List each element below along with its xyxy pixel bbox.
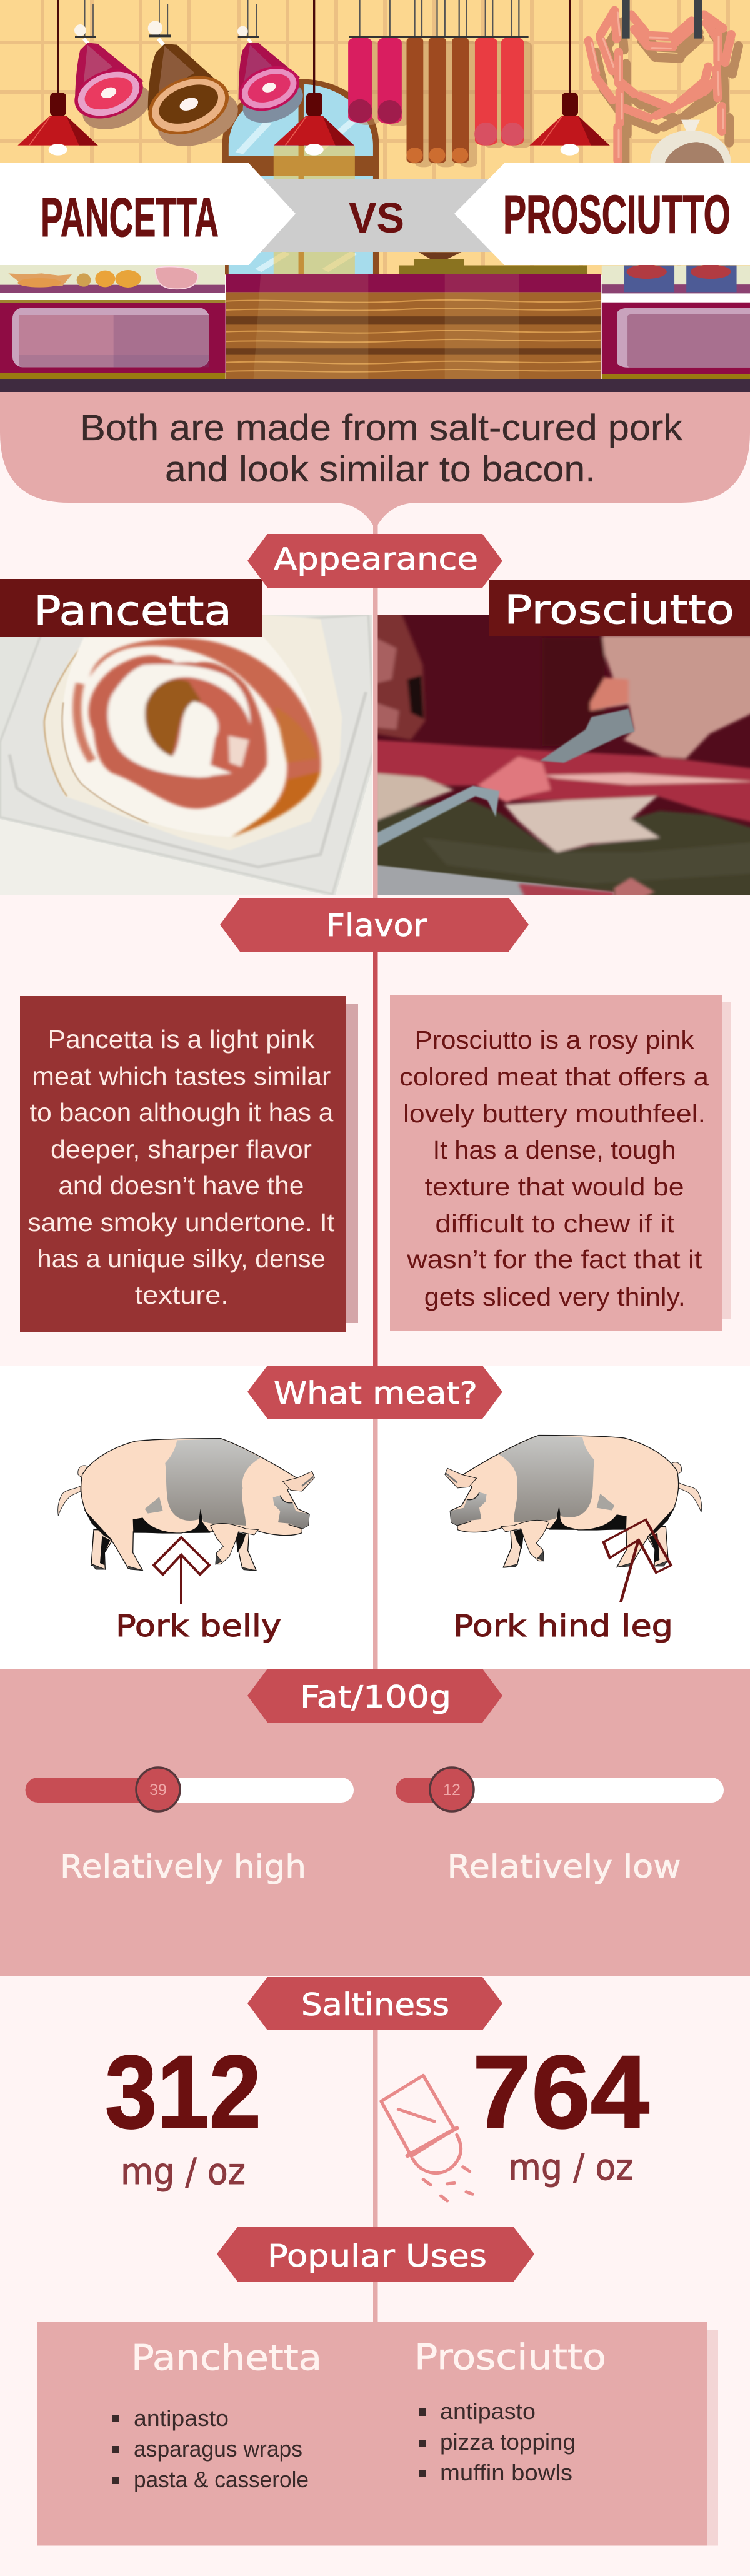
left title banner <box>0 163 296 265</box>
arrow: pork belly <box>154 1537 209 1604</box>
pendant lamps <box>18 0 610 156</box>
label: pancetta: Pancetta <box>34 588 232 635</box>
prosciutto flavor text: It has a dense, tough <box>433 1135 676 1164</box>
callout: intro statement <box>0 392 750 525</box>
central divider: appearance <box>373 519 378 900</box>
slider: pancetta fat <box>25 1768 354 1811</box>
intro text: Both are made from salt-cured pork <box>80 408 683 448</box>
arrow: pork hind leg <box>604 1520 671 1602</box>
label: prosciutto <box>489 580 750 636</box>
central divider: flavor <box>373 950 378 1369</box>
list: prosciutto uses <box>419 2398 582 2485</box>
header illustration: butcher shop <box>0 0 750 392</box>
prosciutto flavor text: texture that would be <box>425 1172 684 1201</box>
label: relatively high: Relatively high <box>60 1849 306 1886</box>
heading: what meat <box>248 1366 502 1419</box>
right display counter <box>602 264 750 379</box>
list: panchetta uses: asparagus wraps <box>134 2436 302 2462</box>
section: what meat background <box>0 1366 750 1669</box>
label: pork belly: Pork belly <box>116 1609 281 1644</box>
prosciutto flavor text: gets sliced very thinly. <box>424 1282 686 1311</box>
icon: pig with belly marker <box>58 1439 314 1604</box>
heading: panchetta uses: Panchetta <box>131 2338 322 2378</box>
label: pork hind leg: Pork hind leg <box>453 1609 673 1644</box>
heading: appearance: Appearance <box>274 541 478 577</box>
list: prosciutto uses: muffin bowls <box>440 2460 572 2485</box>
hanging hams <box>68 0 309 156</box>
photo: prosciutto being sliced <box>375 613 750 905</box>
stat: pancetta saltiness: 312 <box>105 2035 261 2150</box>
label: pancetta <box>0 579 262 637</box>
panel: prosciutto flavor <box>390 995 731 1331</box>
heading: flavor: Flavor <box>326 908 428 943</box>
slider: pancetta fat: 39 <box>149 1781 167 1799</box>
title: vs: VS <box>349 194 404 242</box>
rope of sausages <box>589 0 739 172</box>
unit: mg / oz <box>121 2150 246 2193</box>
slider: prosciutto fat: 12 <box>443 1781 461 1799</box>
ham 1 <box>68 0 150 128</box>
unit: mg / oz <box>509 2146 634 2188</box>
wooden counter <box>226 274 601 379</box>
heading: saltiness <box>248 1977 502 2030</box>
central divider: what meat <box>373 1416 378 1669</box>
vs grey ribbon <box>250 179 500 252</box>
ham 3 <box>232 0 306 119</box>
central divider: popular uses <box>373 2279 378 2323</box>
prosciutto flavor text: difficult to chew if it <box>435 1209 675 1238</box>
sausages <box>348 0 532 167</box>
pancetta flavor text: and doesn’t have the <box>58 1171 304 1200</box>
list: prosciutto uses: antipasto <box>440 2398 536 2424</box>
section: fat background <box>0 1669 750 1976</box>
list: prosciutto uses: pizza topping <box>440 2429 576 2455</box>
heading: appearance <box>248 534 502 588</box>
stat: prosciutto saltiness: 764 <box>472 2035 649 2150</box>
label: relatively low: Relatively low <box>448 1849 681 1886</box>
label: prosciutto: Prosciutto <box>504 587 734 633</box>
prosciutto flavor text: colored meat that offers a <box>399 1062 709 1091</box>
slider: prosciutto fat <box>396 1768 724 1811</box>
pancetta flavor text: texture. <box>135 1280 229 1309</box>
right title banner <box>454 163 750 265</box>
heading: fat per 100g <box>248 1669 502 1723</box>
heading: fat per 100g: Fat/100g <box>300 1679 451 1715</box>
lamp beam centre <box>274 146 355 276</box>
pancetta flavor text: has a unique silky, dense <box>38 1244 326 1273</box>
list: panchetta uses: pasta & casserole <box>134 2467 309 2492</box>
heading: saltiness: Saltiness <box>301 1987 449 2023</box>
pancetta flavor text: to bacon although it has a <box>29 1098 334 1127</box>
central divider: saltiness <box>373 2029 378 2229</box>
heading: what meat: What meat? <box>274 1376 478 1411</box>
intro text: and look similar to bacon. <box>165 449 596 490</box>
scale <box>419 252 462 259</box>
ham shadows <box>76 74 157 138</box>
panel: pancetta flavor <box>20 996 358 1332</box>
prosciutto flavor text: Prosciutto is a rosy pink <box>415 1025 694 1054</box>
left display counter <box>0 265 226 380</box>
icon: pig with hind leg marker <box>445 1436 702 1602</box>
window <box>222 79 379 274</box>
pancetta flavor text: Pancetta is a light pink <box>48 1025 315 1054</box>
heading: flavor <box>220 898 529 952</box>
pancetta flavor text: meat which tastes similar <box>32 1062 331 1090</box>
icon: salt shaker <box>381 2075 472 2201</box>
title: pancetta: PANCETTA <box>41 186 219 248</box>
photo: pancetta <box>0 613 375 897</box>
prosciutto flavor text: lovely buttery mouthfeel. <box>403 1099 706 1128</box>
pancetta flavor text: deeper, sharper flavor <box>51 1135 312 1164</box>
heading: popular uses <box>217 2227 534 2282</box>
heading: prosciutto uses: Prosciutto <box>414 2337 606 2378</box>
list: panchetta uses <box>112 2405 309 2492</box>
pancetta flavor text: same smoky undertone. It <box>28 1208 335 1237</box>
panel: popular uses <box>38 2322 718 2546</box>
prosciutto flavor text: wasn’t for the fact that it <box>406 1245 702 1274</box>
heading: popular uses: Popular Uses <box>268 2238 487 2274</box>
list: panchetta uses: antipasto <box>134 2405 229 2431</box>
stat: pancetta saltiness <box>105 2035 261 2193</box>
ham 2 <box>140 0 237 145</box>
